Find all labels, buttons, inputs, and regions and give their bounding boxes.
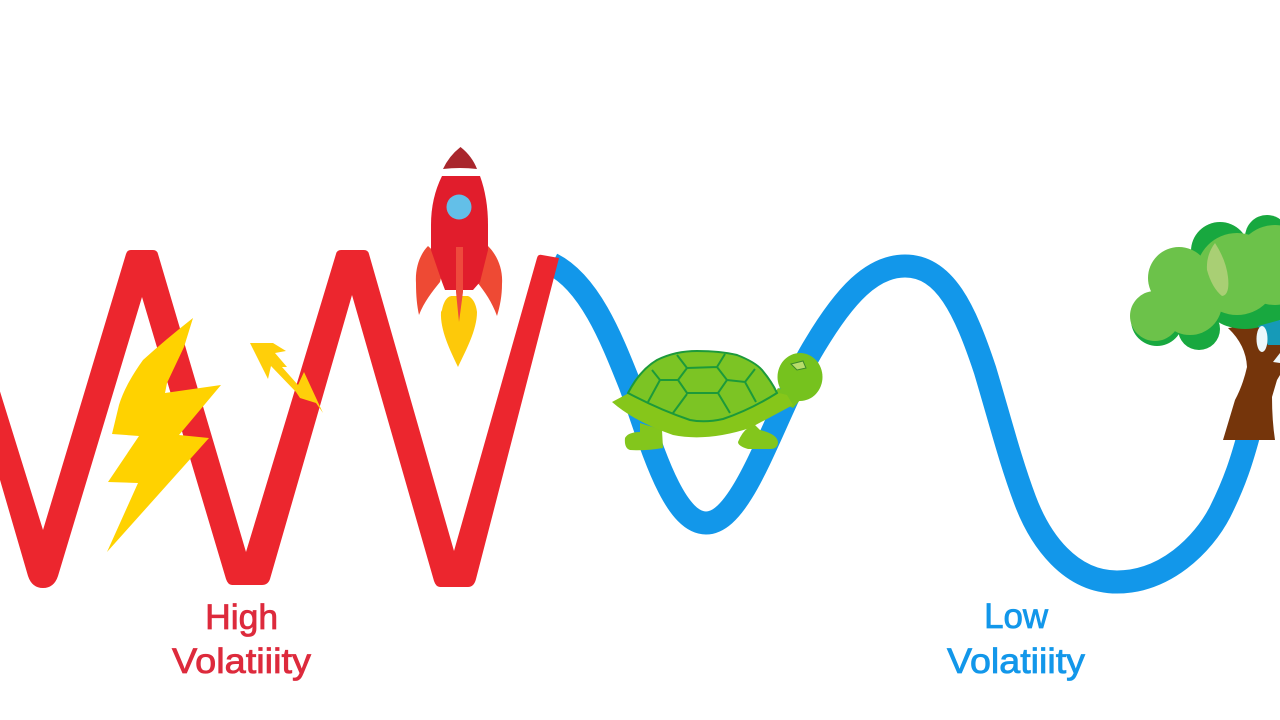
turtle eye bbox=[791, 361, 806, 370]
rocket nose cone bbox=[443, 147, 477, 169]
icon: lightning bolt bbox=[107, 318, 221, 552]
turtle feet bbox=[625, 423, 778, 450]
icon: tree bbox=[1130, 215, 1280, 440]
label: low volatility: Volatiiity bbox=[947, 642, 1086, 681]
rocket body bbox=[431, 176, 488, 290]
rocket centre fin bbox=[456, 247, 463, 322]
rocket window bbox=[446, 194, 472, 220]
tree canopy light bbox=[1130, 225, 1280, 341]
tree blue blob bbox=[1258, 320, 1280, 345]
turtle head bbox=[778, 353, 822, 401]
turtle shell plates bbox=[648, 354, 756, 413]
icon: turtle bbox=[612, 351, 822, 450]
tree trunk bbox=[1223, 322, 1280, 440]
tree white highlight bbox=[1256, 326, 1268, 352]
icon: small yellow arrow bbox=[250, 343, 323, 413]
label: low volatility: Low bbox=[984, 597, 1049, 636]
rocket flame bbox=[441, 296, 477, 367]
tree highlight bbox=[1207, 243, 1228, 296]
rocket fins bbox=[416, 246, 502, 316]
icon: rocket bbox=[416, 147, 502, 367]
high volatility red zigzag bbox=[0, 250, 559, 588]
low volatility blue wave bbox=[552, 264, 1250, 582]
tree canopy dark bbox=[1131, 215, 1280, 350]
label: high volatility: Volatiiity bbox=[172, 642, 312, 681]
turtle shell bbox=[628, 351, 777, 421]
label: high volatility: High bbox=[205, 598, 278, 637]
turtle underbelly bbox=[612, 392, 793, 437]
